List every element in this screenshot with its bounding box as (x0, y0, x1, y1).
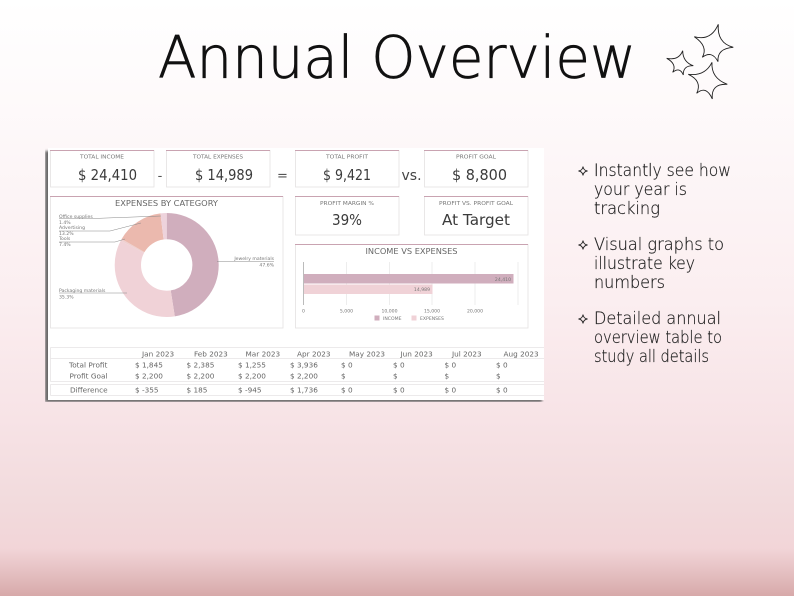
donut labels (58, 214, 275, 300)
table header: Apr 2023 (297, 350, 331, 358)
table header: Aug 2023 (504, 350, 539, 358)
row: total profit: $ 1,845 (135, 360, 163, 370)
row: total profit: $ 2,385 (186, 360, 214, 370)
table header: Feb 2023 (194, 350, 228, 358)
donut labels: Packaging materials (59, 288, 106, 294)
donut labels: Tools (58, 236, 71, 242)
operator: equals: = (277, 169, 288, 184)
row: profit goal: $ (393, 372, 398, 380)
bullet: detailed table: Detailed annual (594, 309, 721, 328)
bar value labels: 24,410 (495, 277, 511, 283)
donut labels: Office supplies (59, 214, 93, 220)
row: difference: $ 0 (393, 386, 405, 394)
donut labels: Advertising (59, 225, 85, 231)
card: total profit: TOTAL PROFIT (325, 154, 369, 160)
bar: expenses (304, 284, 432, 294)
card: profit vs goal (424, 196, 528, 235)
row: profit goal: $ (444, 372, 450, 380)
bullet: visual graphs: numbers (594, 273, 665, 292)
card: profit goal: PROFIT GOAL (456, 154, 497, 160)
bar value labels (414, 277, 511, 293)
card: profit margin: 39% (332, 211, 362, 229)
bullet: see year: tracking (594, 199, 660, 218)
card: profit goal (424, 150, 528, 187)
table header: Jul 2023 (451, 350, 482, 358)
bar value labels: 14,989 (414, 287, 430, 293)
panel: expenses by category (50, 196, 283, 328)
icon: stars (667, 24, 733, 99)
donut labels: 13.2% (59, 231, 74, 237)
bullet: see year: Instantly see how (594, 161, 731, 180)
table header: Jun 2023 (400, 350, 433, 358)
row: profit goal: $ 2,200 (135, 372, 163, 380)
x-axis tick labels (302, 308, 483, 314)
x-axis tick labels: 20,000 (467, 308, 483, 314)
row: total profit: $ 0 (496, 360, 508, 370)
table header: Mar 2023 (246, 350, 281, 358)
bar: income (304, 274, 514, 284)
row: difference (70, 386, 508, 394)
dashboard screenshot (45, 148, 544, 402)
row: difference: $ 0 (496, 386, 508, 394)
donut labels: 47.6% (259, 262, 275, 268)
card: profit margin (295, 196, 399, 235)
card: total income: $ 24,410 (78, 166, 137, 184)
row: difference: $ 0 (444, 386, 456, 394)
bullet: visual graphs: illustrate key (594, 254, 695, 273)
bullet: detailed table: overview table to (594, 328, 722, 347)
bullet: visual graphs (578, 235, 724, 292)
card: profit vs goal: PROFIT VS. PROFIT GOAL (439, 201, 514, 207)
legend: EXPENSES (420, 316, 444, 322)
panel: income vs expenses (295, 244, 528, 328)
card: profit goal: $ 8,800 (452, 166, 507, 184)
row: profit goal: $ (496, 372, 501, 380)
row: total profit: $ 3,936 (290, 360, 318, 370)
row: profit goal (70, 372, 501, 380)
row: difference: $ 185 (186, 386, 207, 394)
row: difference: Difference (70, 386, 108, 394)
table: annual overview (50, 348, 544, 396)
bullet: see year: your year is (594, 180, 687, 199)
bullet: see year (578, 161, 731, 218)
bullet: visual graphs: Visual graphs to (594, 235, 724, 254)
row: total profit: $ 0 (444, 360, 456, 370)
card: profit margin: PROFIT MARGIN % (320, 201, 374, 207)
row: total profit: Total Profit (68, 360, 108, 370)
donut labels: 1.4% (59, 220, 71, 226)
card: total expenses: $ 14,989 (195, 166, 253, 184)
card: total profit: $ 9,421 (323, 166, 371, 184)
row: profit goal: $ (341, 372, 346, 380)
row: total profit: $ 0 (341, 360, 353, 370)
row: difference: $ 0 (341, 386, 353, 394)
title: Annual Overview (158, 24, 636, 92)
donut labels: 7.4% (59, 242, 71, 248)
operator: minus: - (158, 169, 163, 184)
legend (374, 316, 444, 322)
x-axis tick labels: 10,000 (381, 308, 398, 314)
row: total profit: $ 1,255 (238, 360, 266, 370)
row: total profit: $ 0 (393, 360, 405, 370)
row: difference: $ -945 (238, 386, 262, 394)
legend: INCOME (383, 316, 402, 322)
row: profit goal: $ 2,200 (238, 372, 266, 380)
x-axis tick labels: 15,000 (424, 308, 440, 314)
row: total profit (68, 360, 508, 370)
table header (141, 350, 539, 358)
chart grid (346, 262, 518, 305)
row: profit goal: $ 2,200 (290, 372, 318, 380)
heading: expenses by category: EXPENSES BY CATEGORY (115, 198, 219, 208)
row: profit goal: $ 2,200 (186, 372, 215, 380)
x-axis tick labels: 5,000 (340, 308, 353, 314)
axis (302, 262, 304, 305)
donut leader lines (59, 216, 274, 293)
card: total expenses (166, 150, 270, 187)
card: total expenses: TOTAL EXPENSES (192, 154, 243, 160)
screenshot shadow (45, 151, 542, 402)
heading: income vs expenses: INCOME VS EXPENSES (366, 246, 458, 256)
donut chart (128, 226, 206, 304)
table header: Jan 2023 (141, 350, 174, 358)
card: total income: TOTAL INCOME (79, 154, 124, 160)
bullet: detailed table (578, 309, 722, 366)
card: total profit (295, 150, 399, 187)
row: profit goal: Profit Goal (70, 372, 107, 380)
donut labels: 35.3% (59, 294, 74, 300)
bullet: detailed table: study all details (594, 347, 709, 366)
card: total income (50, 150, 154, 187)
donut labels: Jewelry materials (233, 256, 275, 262)
row: difference: $ 1,736 (290, 386, 318, 394)
row: difference: $ -355 (135, 386, 159, 394)
operator: vs: vs. (401, 168, 422, 184)
x-axis tick labels: 0 (302, 308, 305, 314)
card: profit vs goal: At Target (442, 211, 510, 229)
table header: May 2023 (349, 350, 385, 358)
